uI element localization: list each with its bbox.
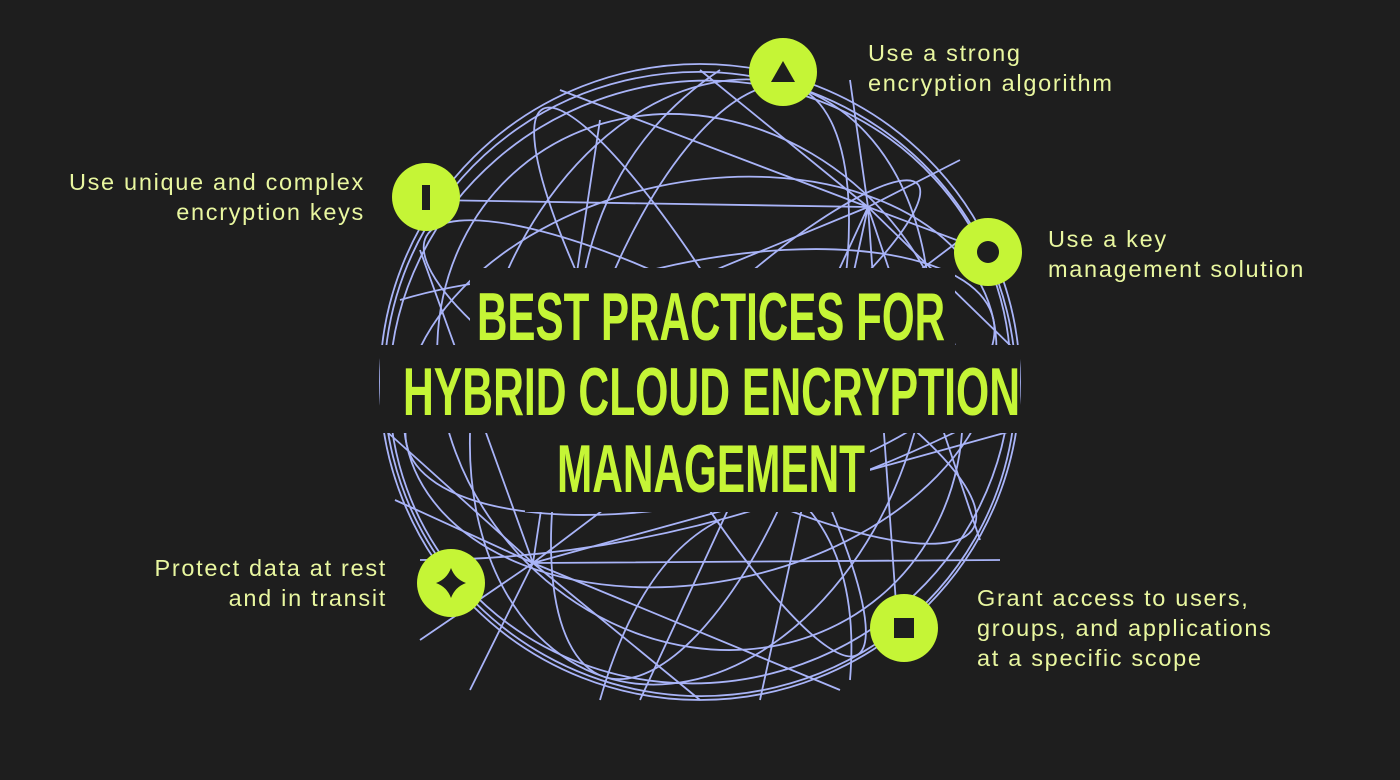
- label: key management: management solution: [1048, 256, 1305, 282]
- label: unique keys: encryption keys: [176, 199, 365, 225]
- icon: ring: [954, 218, 1022, 286]
- label: grant access: at a specific scope: [977, 645, 1203, 671]
- label: grant access: Grant access to users,: [977, 585, 1250, 611]
- icon: diamond: [417, 549, 485, 617]
- title: HYBRID CLOUD ENCRYPTION: [403, 354, 1020, 430]
- icon: bar: [392, 163, 460, 231]
- icon: triangle: [749, 38, 817, 106]
- label: protect data: and in transit: [229, 585, 387, 611]
- globe wireframe: [304, 0, 1096, 771]
- label: strong algorithm: encryption algorithm: [868, 70, 1114, 96]
- label: protect data: Protect data at rest: [154, 555, 387, 581]
- label: grant access: groups, and applications: [977, 615, 1273, 641]
- title backdrop: [380, 268, 1020, 512]
- label: strong algorithm: Use a strong: [868, 40, 1022, 66]
- icon: square: [870, 594, 938, 662]
- label: key management: Use a key: [1048, 226, 1168, 252]
- title: [403, 279, 1020, 507]
- label: key management: [1048, 226, 1305, 282]
- label: strong algorithm: [868, 40, 1114, 96]
- title: MANAGEMENT: [557, 431, 865, 507]
- label: protect data: [154, 555, 387, 611]
- label: unique keys: Use unique and complex: [69, 169, 365, 195]
- label: grant access: [977, 585, 1273, 671]
- label: unique keys: [69, 169, 365, 225]
- title: BEST PRACTICES FOR: [477, 279, 945, 355]
